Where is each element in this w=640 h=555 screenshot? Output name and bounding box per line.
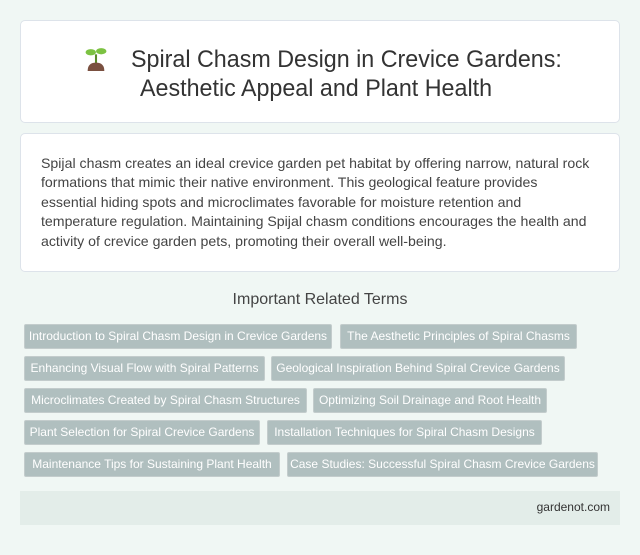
tags: The Aesthetic Principles of Spiral Chasms (347, 329, 570, 343)
tags: Enhancing Visual Flow with Spiral Patterns (31, 361, 258, 375)
title: Aesthetic Appeal and Plant Health (140, 75, 492, 102)
title (131, 46, 562, 102)
tags: Installation Techniques for Spiral Chasm Designs (274, 425, 535, 439)
title: Spiral Chasm Design in Crevice Gardens: (131, 46, 562, 73)
tags: Introduction to Spiral Chasm Design in Crevice Gardens (29, 329, 327, 343)
tags: Case Studies: Successful Spiral Chasm Crevice Gardens (290, 457, 595, 471)
description text: temperature regulation. Maintaining Spijal chasm conditions encourages the health and (41, 213, 587, 229)
description text: activity of crevice garden pets, promoting their overall well-being. (41, 233, 447, 249)
description text: Spijal chasm creates an ideal crevice garden pet habitat by offering narrow, natural rock (41, 155, 589, 171)
tags: Microclimates Created by Spiral Chasm Structures (31, 393, 300, 407)
tags: Plant Selection for Spiral Crevice Gardens (30, 425, 254, 439)
footer (20, 491, 620, 525)
description card (20, 133, 620, 272)
footer text: gardenot.com (537, 500, 610, 514)
heading: related terms: Important Related Terms (233, 291, 407, 308)
description text (41, 155, 590, 249)
tags: Maintenance Tips for Sustaining Plant Health (32, 457, 272, 471)
tags: Optimizing Soil Drainage and Root Health (319, 393, 541, 407)
icon: seedling (86, 48, 106, 71)
description text: formations that mimic their native environment. This geological feature provides (41, 174, 537, 190)
header card (20, 20, 620, 123)
tags: Geological Inspiration Behind Spiral Crevice Gardens (276, 361, 560, 375)
description text: essential hiding spots and microclimates favorable for moisture retention and (41, 194, 521, 210)
